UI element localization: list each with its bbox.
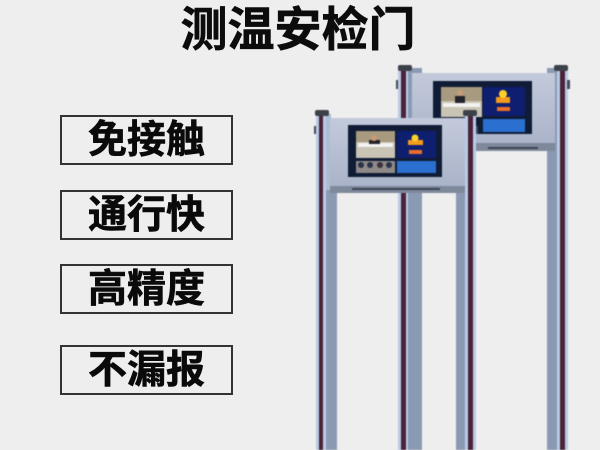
- feature label: no contact: [60, 115, 233, 165]
- front gate: [314, 110, 478, 450]
- feature label: no contact: 免接触: [88, 119, 205, 162]
- title: 测温安检门: [180, 3, 416, 56]
- feature label: fast passage: 通行快: [88, 194, 205, 237]
- feature label: no missed reports: [60, 345, 233, 395]
- back gate screen: [433, 81, 532, 134]
- feature label: fast passage: [60, 190, 233, 240]
- front gate right pillar: [456, 110, 478, 450]
- back gate left pillar: [396, 65, 422, 450]
- front gate header panel: [330, 118, 465, 186]
- feature label: high accuracy: [60, 264, 233, 314]
- back gate: [396, 65, 570, 450]
- front gate screen: [348, 125, 442, 177]
- front gate left pillar: [314, 110, 337, 450]
- back gate right pillar: [547, 65, 570, 450]
- back gate header panel: [412, 73, 555, 145]
- feature label: high accuracy: 高精度: [88, 268, 205, 311]
- feature label: no missed reports: 不漏报: [88, 349, 205, 392]
